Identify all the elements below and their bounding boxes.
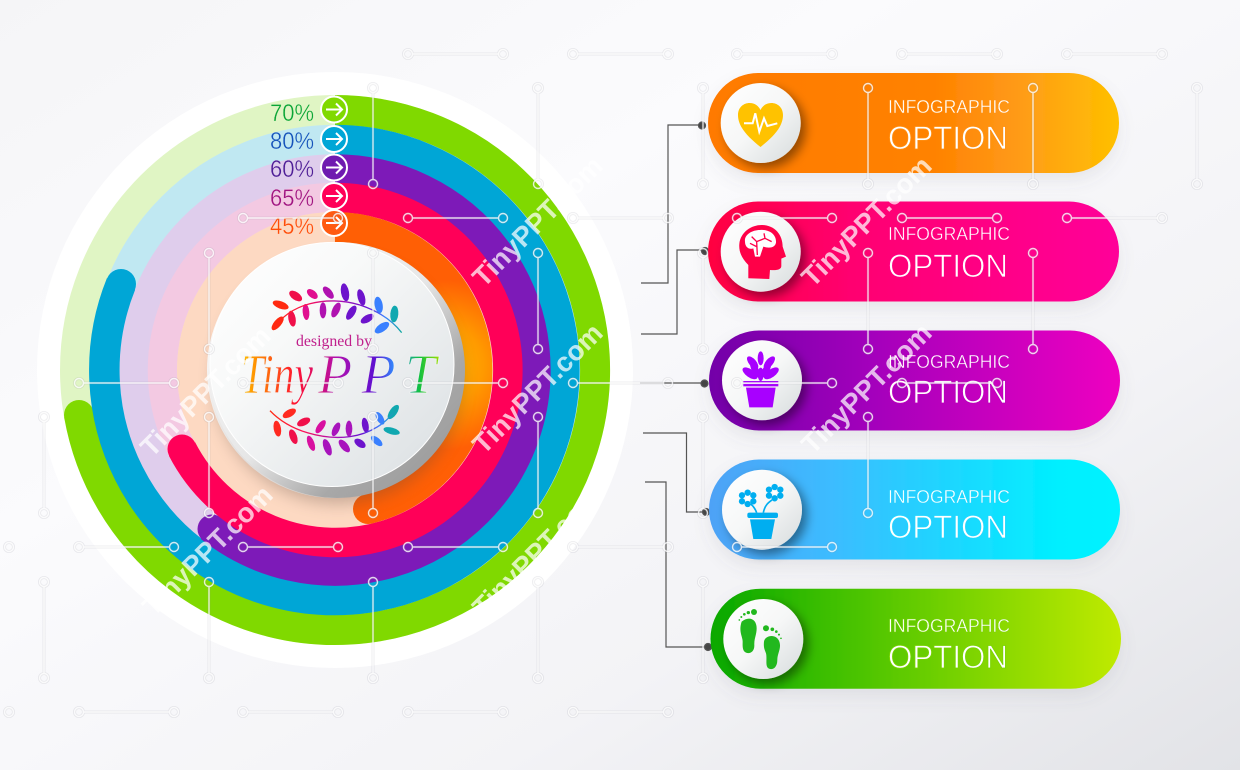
ring: pink 65% bbox=[168, 197, 508, 542]
watermarks: TinyPPT.com bbox=[795, 317, 938, 460]
label bbox=[888, 351, 1010, 410]
label: 45%: 45% bbox=[270, 213, 314, 240]
watermarks: TinyPPT.com bbox=[466, 480, 609, 623]
label: 45% bbox=[270, 210, 347, 240]
label: 60% bbox=[270, 154, 347, 183]
watermarks: TinyPPT.com bbox=[466, 150, 609, 293]
label: INFOGRAPHIC bbox=[888, 96, 1010, 117]
label bbox=[888, 486, 1010, 545]
label: 70% bbox=[270, 96, 347, 127]
icon badge bbox=[721, 212, 801, 292]
label: INFOGRAPHIC bbox=[888, 615, 1010, 636]
label bbox=[888, 615, 1010, 675]
panel: option 3 purple bbox=[709, 330, 1120, 430]
label bbox=[888, 223, 1010, 284]
pale ring tracks bbox=[75, 110, 595, 630]
icon: footprints bbox=[738, 609, 782, 669]
pill bbox=[709, 330, 1120, 430]
connector lines bbox=[640, 122, 712, 650]
label: 70%: 70% bbox=[270, 100, 314, 127]
label: OPTION bbox=[888, 120, 1008, 156]
icon: flower pot bbox=[739, 484, 783, 539]
icon badge bbox=[722, 470, 802, 550]
icon badge bbox=[722, 340, 802, 420]
label: 60%: 60% bbox=[270, 156, 314, 183]
icon: heart with pulse bbox=[738, 103, 783, 147]
panel: option 1 orange bbox=[708, 73, 1119, 173]
icon badge bbox=[723, 599, 803, 679]
logo: designed by TinyPPT bbox=[241, 283, 440, 457]
logo text: PPT: PPT bbox=[317, 344, 440, 406]
label: OPTION bbox=[888, 509, 1008, 545]
label: OPTION bbox=[888, 248, 1008, 284]
logo text: Tiny: Tiny bbox=[241, 344, 313, 406]
icon badge bbox=[721, 83, 801, 163]
panel: circular progress chart bbox=[37, 72, 633, 668]
top wreath bbox=[269, 283, 402, 336]
watermarks: TinyPPT.com bbox=[795, 150, 938, 293]
icon: head with brain bbox=[739, 225, 786, 279]
icon: succulent pot bbox=[741, 351, 781, 407]
ring: orange 45% bbox=[335, 227, 477, 524]
ring: blue 80% bbox=[104, 140, 564, 600]
watermarks: TinyPPT.com bbox=[134, 320, 277, 463]
label: OPTION bbox=[888, 639, 1008, 675]
panel: option 2 pink bbox=[708, 202, 1119, 302]
logo text: designed by: designed by bbox=[296, 333, 372, 350]
label: INFOGRAPHIC bbox=[888, 223, 1010, 244]
pill bbox=[709, 460, 1120, 560]
bottom wreath bbox=[270, 403, 401, 457]
label bbox=[888, 96, 1010, 156]
centre disc shadow bbox=[214, 256, 462, 504]
pill bbox=[708, 202, 1119, 302]
centre disc bbox=[210, 242, 454, 486]
pill bbox=[710, 589, 1121, 689]
panel: option 4 blue bbox=[709, 460, 1120, 560]
watermarks bbox=[134, 150, 938, 623]
ring: green 70% bbox=[64, 110, 595, 630]
label: 80%: 80% bbox=[270, 128, 314, 155]
pill bbox=[708, 73, 1119, 173]
label: INFOGRAPHIC bbox=[888, 351, 1010, 372]
centre disc base bbox=[209, 242, 465, 498]
watermarks: TinyPPT.com bbox=[136, 479, 279, 622]
label: 65%: 65% bbox=[270, 185, 314, 212]
label: OPTION bbox=[888, 374, 1008, 410]
label: 65% bbox=[270, 183, 347, 212]
label: INFOGRAPHIC bbox=[888, 486, 1010, 507]
ring: purple 60% bbox=[198, 169, 536, 571]
panel: option 5 green bbox=[710, 589, 1121, 689]
watermarks: TinyPPT.com bbox=[466, 317, 609, 460]
white halo behind rings bbox=[37, 72, 633, 668]
label: 80% bbox=[270, 126, 347, 155]
